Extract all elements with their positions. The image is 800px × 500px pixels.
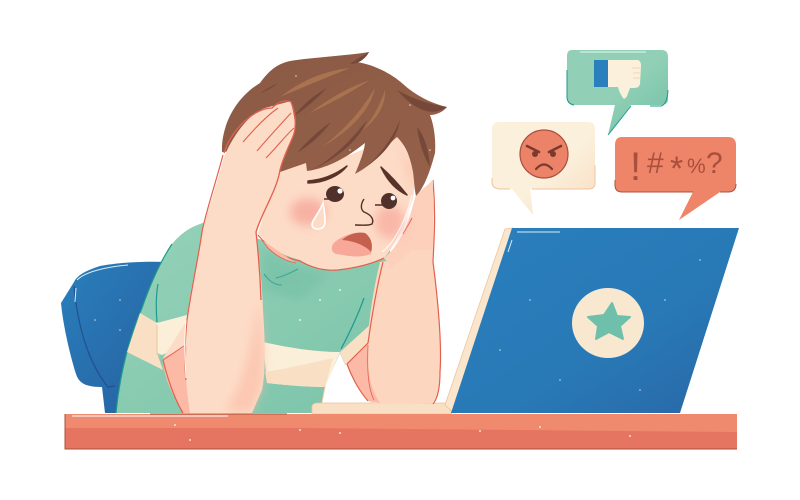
- ear hand right: [384, 180, 433, 268]
- head: [222, 52, 447, 270]
- symbols text: [630, 145, 723, 189]
- chin outline: [258, 235, 384, 270]
- laptop lid edge: [445, 228, 513, 412]
- tear: [312, 203, 325, 229]
- star badge: [572, 288, 644, 358]
- laptop screen: [451, 228, 739, 413]
- symbols text: !: [630, 145, 641, 189]
- symbols text: %: [687, 155, 706, 178]
- icon: thumbs down: [594, 60, 641, 99]
- eyebrows: [308, 166, 407, 195]
- laptop: [445, 228, 739, 413]
- symbols text: #: [647, 147, 664, 180]
- shirt: [116, 222, 392, 413]
- paper texture specks: [94, 75, 701, 441]
- speech bubble: thumbs down: [567, 50, 668, 135]
- shirt stripe: right cuff: [340, 323, 372, 365]
- icon: angry face: [520, 130, 568, 178]
- table: [65, 414, 737, 449]
- eyes: [326, 186, 344, 202]
- arm: left with hand: [163, 101, 295, 413]
- cheek right: [375, 205, 405, 239]
- nose: [355, 199, 373, 225]
- laptop base: [312, 403, 452, 414]
- speech bubble: angry face: [492, 122, 595, 215]
- mouth: [332, 233, 372, 256]
- chair: [61, 262, 170, 413]
- cheek left: [290, 198, 326, 226]
- forehead shade: [397, 137, 414, 195]
- hair light strands: [280, 68, 385, 147]
- speech bubble: swearing symbols: [615, 137, 736, 220]
- hair dark strands: [260, 52, 447, 173]
- shirt stripe: centre band: [263, 342, 340, 387]
- tear streak: [382, 195, 412, 252]
- arm: right: [347, 180, 441, 404]
- shirt stripe: left band: [127, 313, 163, 370]
- shirt stripe: left cuff: [157, 315, 187, 355]
- hair: [222, 52, 447, 196]
- symbols text: ?: [706, 147, 723, 180]
- face: [258, 135, 416, 270]
- symbols text: *: [670, 150, 683, 188]
